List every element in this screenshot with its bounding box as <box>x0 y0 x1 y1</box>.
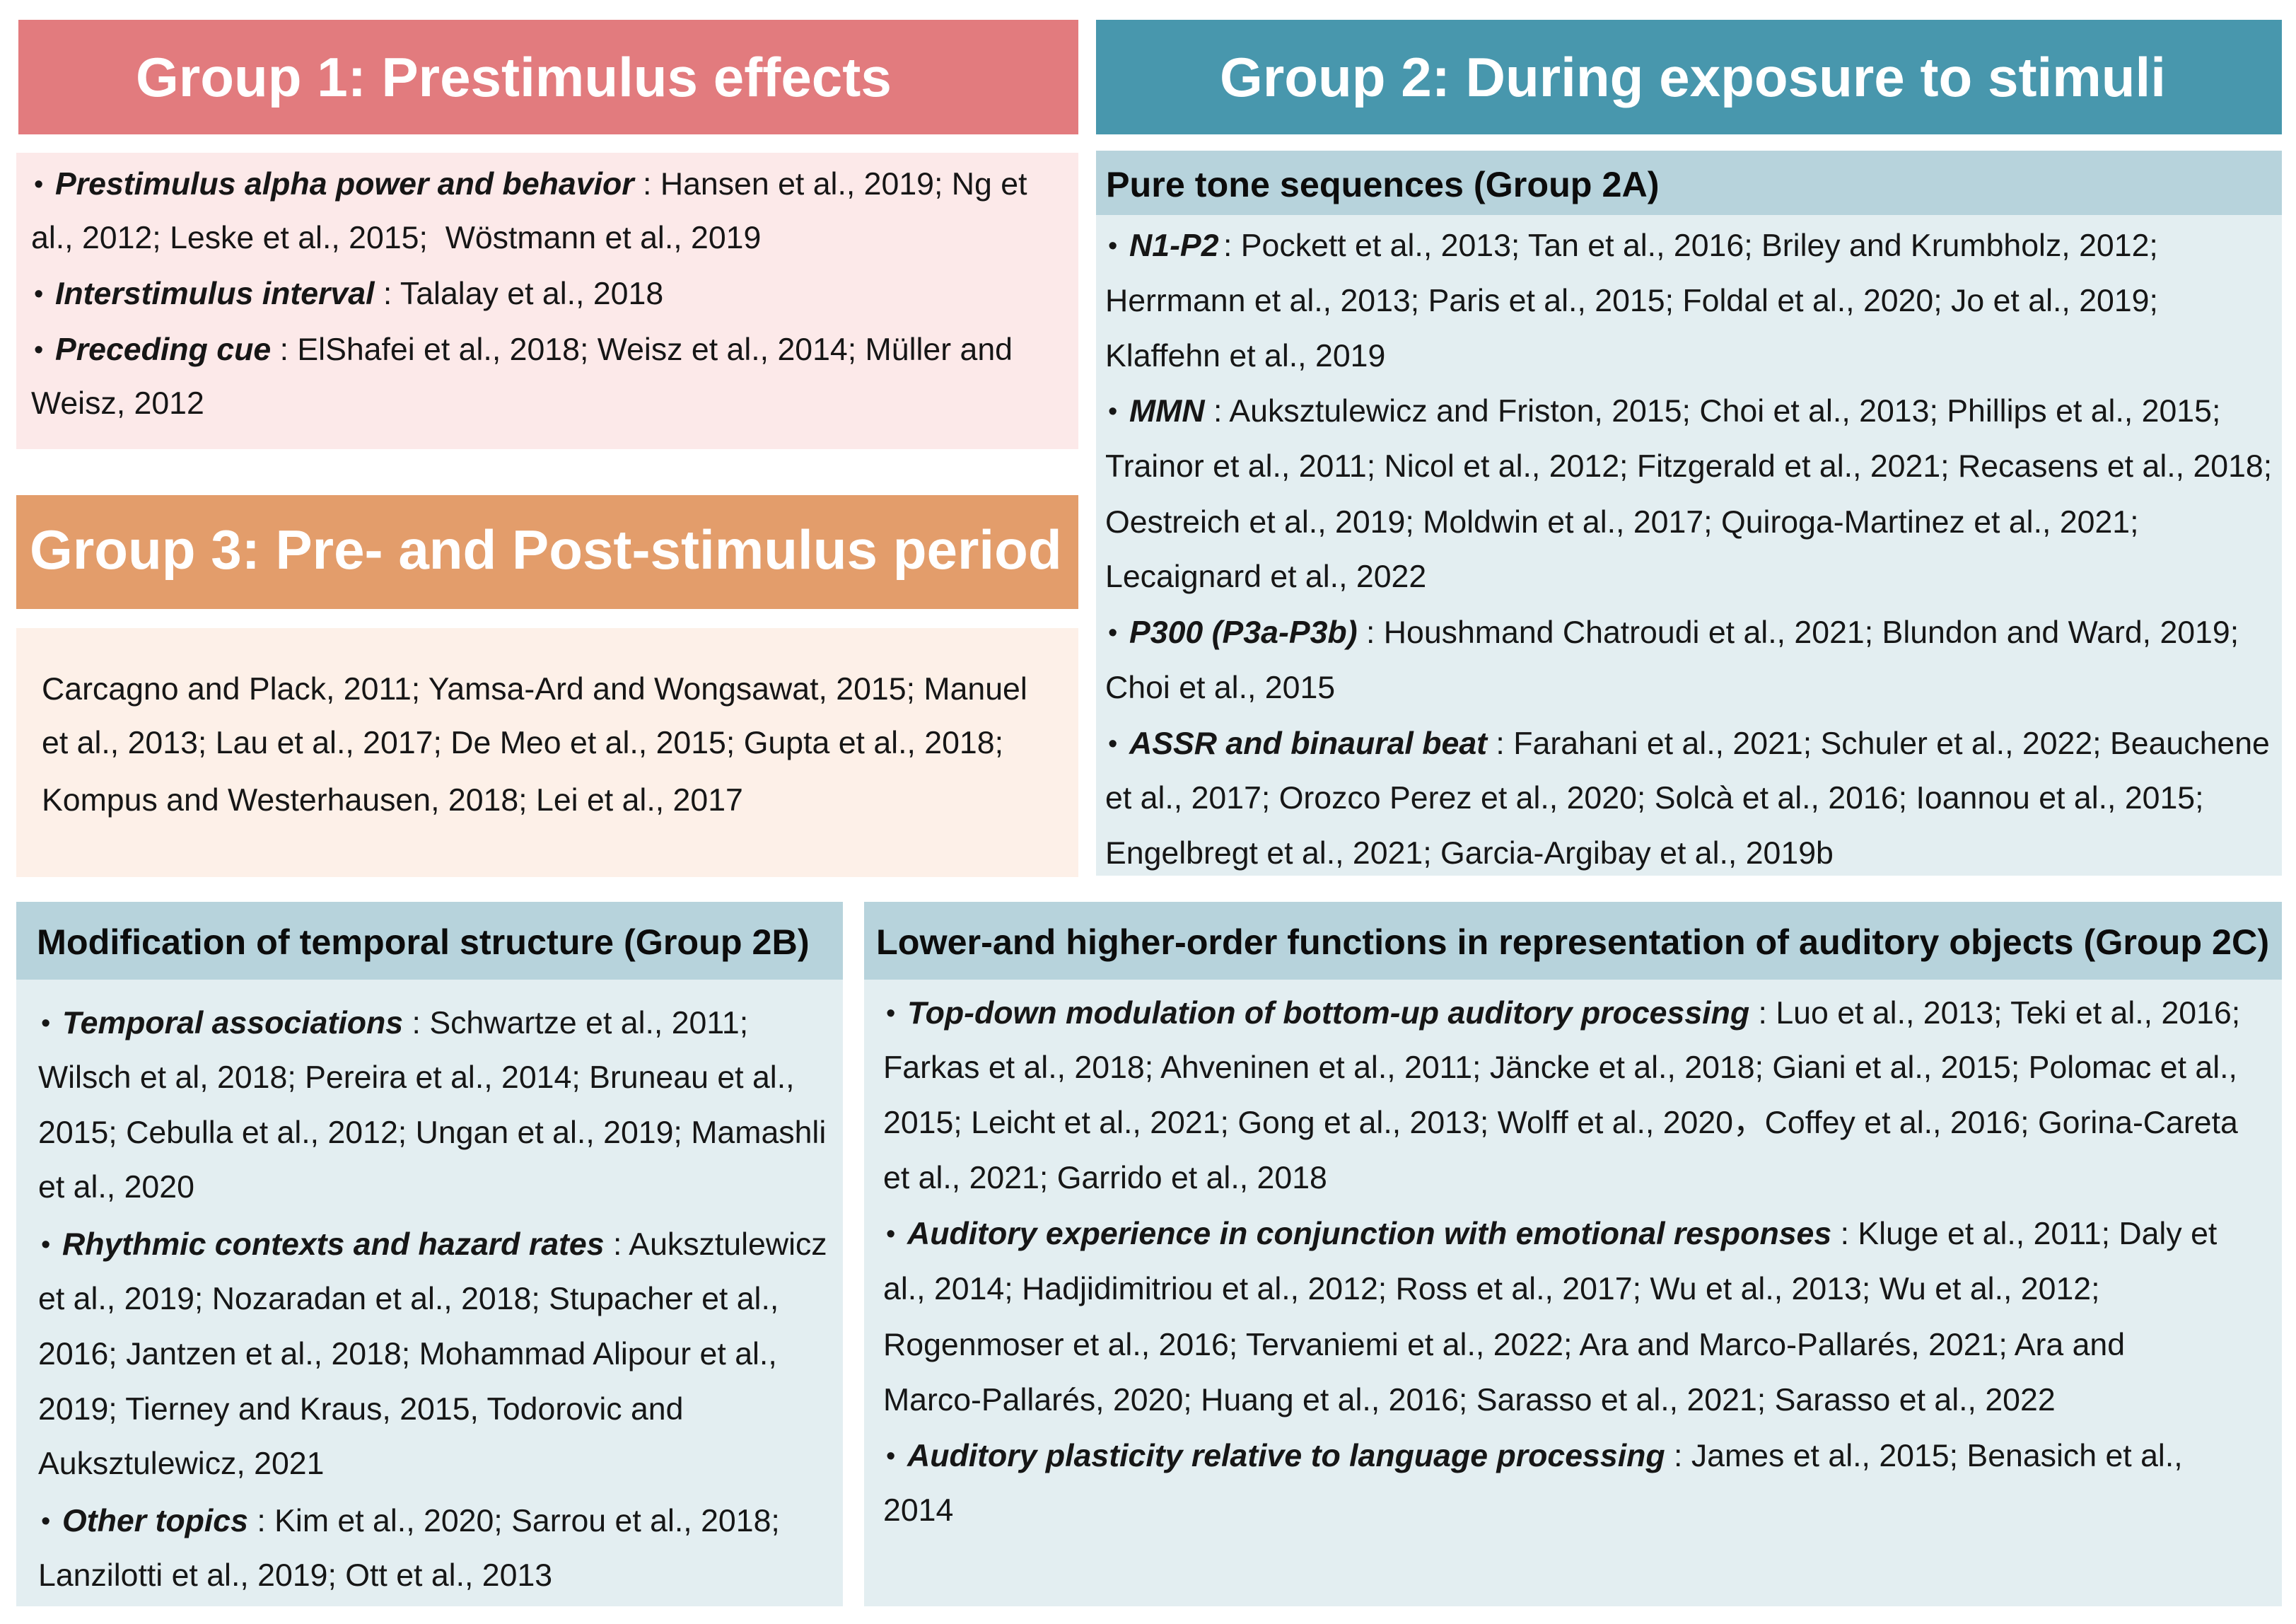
text: rhythmic contexts line 3: 2016; Jantzen et al., 2018; Mohammad Alipour et al., <box>38 1337 777 1371</box>
text: MMN line 3: Oestreich et al., 2019; Moldwin et al., 2017; Quiroga-Martinez et al., 2021; <box>1105 505 2139 540</box>
text: auditory experience line 4: Marco-Pallarés, 2020; Huang et al., 2016; Sarasso et al., 2021; Sarasso et al., 2022 <box>883 1383 2056 1417</box>
text: P300: P300 (P3a-P3b) : Houshmand Chatroudi et al., 2021; Blundon and Ward, 2019; <box>1129 615 2239 650</box>
text: other topics: Other topics : Kim et al., 2020; Sarrou et al., 2018; <box>62 1504 780 1538</box>
text: Group 3 line 1: Carcagno and Plack, 2011; Yamsa-Ard and Wongsawat, 2015; Manuel <box>42 672 1027 707</box>
text: ASSR line 3: Engelbregt et al., 2021; Garcia-Argibay et al., 2019b <box>1105 836 1834 871</box>
text: auditory experience line 2: al., 2014; Hadjidimitriou et al., 2012; Ross et al., 2017; Wu et al., 2013; Wu et al., 2012; <box>883 1272 2100 1306</box>
text: top-down modulation line 4: et al., 2021; Garrido et al., 2018 <box>883 1161 1327 1195</box>
panel: Group 3 references <box>16 628 1078 877</box>
heading: Group 1 <box>18 20 1078 134</box>
text: ASSR line 2: et al., 2017; Orozco Perez et al., 2020; Solcà et al., 2016; Ioannou et al., 2015; <box>1105 781 2204 816</box>
text: temporal associations line 4: et al., 2020 <box>38 1170 194 1205</box>
text: auditory plasticity: • <box>886 1442 895 1471</box>
subheading: Group 2C <box>864 902 2282 980</box>
text: preceding cue: Preceding cue : ElShafei et al., 2018; Weisz et al., 2014; Müller and <box>55 332 1013 367</box>
panel: Group 2C <box>864 902 2282 1606</box>
text: N1-P2: • <box>1108 231 1117 261</box>
subheading: Group 2B: Modification of temporal structure (Group 2B) <box>37 922 810 962</box>
panel: Group 1 references <box>16 153 1078 449</box>
text: rhythmic contexts line 4: 2019; Tierney and Kraus, 2015, Todorovic and <box>38 1392 683 1427</box>
text: N1-P2: N1-P2 : Pockett et al., 2013; Tan et al., 2016; Briley and Krumbholz, 2012; <box>1129 228 2158 263</box>
text: top-down modulation: • <box>886 999 895 1028</box>
text: temporal associations line 3: 2015; Cebulla et al., 2012; Ungan et al., 2019; Mamashli <box>38 1115 826 1150</box>
text: ASSR: • <box>1108 729 1117 759</box>
text: MMN line 4: Lecaignard et al., 2022 <box>1105 559 1426 594</box>
text: MMN line 2: Trainor et al., 2011; Nicol et al., 2012; Fitzgerald et al., 2021; Recasens et al., 2018; <box>1105 449 2272 484</box>
text: MMN: • <box>1108 397 1117 427</box>
heading: Group 3: Group 3: Pre- and Post-stimulus period <box>30 518 1062 581</box>
text: preceding cue: • <box>34 335 43 365</box>
panel: Group 2B <box>16 902 843 1606</box>
heading: Group 2 <box>1096 20 2282 134</box>
text: auditory experience line 3: Rogenmoser et al., 2016; Tervaniemi et al., 2022; Ara and Marco-Pallarés, 2021; Ara and <box>883 1328 2125 1362</box>
text: P300: • <box>1108 618 1117 648</box>
text: other topics: • <box>41 1507 50 1536</box>
subheading: Group 2C: Lower-and higher-order functions in representation of auditory objects (Group 2C) <box>876 922 2269 962</box>
subheading: Group 2A: Pure tone sequences (Group 2A) <box>1106 164 1660 204</box>
text: top-down modulation line 3: 2015; Leicht et al., 2021; Gong et al., 2013; Wolff et al., 2020，Coffey et al., 2016; Gorina-Careta <box>883 1106 2238 1140</box>
subheading: Group 2B <box>16 902 843 980</box>
text: top-down modulation line 2: Farkas et al., 2018; Ahveninen et al., 2011; Jäncke et al., 2018; Giani et al., 2015; Polomac et al., <box>883 1050 2237 1085</box>
text: preceding cue continuation: Weisz, 2012 <box>31 386 204 421</box>
text: top-down modulation: Top-down modulation of bottom-up auditory processing : Luo et al., 2013; Teki et al., 2016; <box>907 996 2240 1031</box>
text: Group 3 line 3: Kompus and Westerhausen, 2018; Lei et al., 2017 <box>42 783 743 818</box>
text: temporal associations: • <box>41 1009 50 1038</box>
heading: Group 3 <box>16 495 1078 609</box>
panel: Group 2A <box>1096 151 2282 876</box>
text: N1-P2 line 3: Klaffehn et al., 2019 <box>1105 339 1385 373</box>
text: N1-P2 line 2: Herrmann et al., 2013; Paris et al., 2015; Foldal et al., 2020; Jo et al., 2019; <box>1105 284 2158 318</box>
text: interstimulus interval: • <box>34 279 43 309</box>
text: prestimulus alpha continuation: al., 2012; Leske et al., 2015; Wöstmann et al., 2019 <box>31 221 761 255</box>
text: rhythmic contexts: • <box>41 1230 50 1260</box>
text: other topics line 2: Lanzilotti et al., 2019; Ott et al., 2013 <box>38 1558 552 1593</box>
text: rhythmic contexts line 2: et al., 2019; Nozaradan et al., 2018; Stupacher et al., <box>38 1282 779 1316</box>
subheading: Group 2A <box>1096 151 2282 215</box>
text: rhythmic contexts line 5: Auksztulewicz, 2021 <box>38 1446 324 1481</box>
heading: Group 2: Group 2: During exposure to stimuli <box>1220 46 2166 108</box>
text: prestimulus alpha power: • <box>34 170 43 199</box>
text: auditory experience: Auditory experience in conjunction with emotional responses : Kluge et al., 2011; Daly et <box>907 1217 2217 1251</box>
text: rhythmic contexts: Rhythmic contexts and hazard rates : Auksztulewicz <box>62 1227 827 1262</box>
text: temporal associations: Temporal associations : Schwartze et al., 2011; <box>62 1006 748 1040</box>
text: MMN: MMN : Auksztulewicz and Friston, 2015; Choi et al., 2013; Phillips et al., 2015; <box>1129 394 2220 429</box>
text: interstimulus interval: Interstimulus interval : Talalay et al., 2018 <box>55 277 663 311</box>
text: ASSR: ASSR and binaural beat : Farahani et al., 2021; Schuler et al., 2022; Beauchene <box>1129 726 2270 761</box>
text: auditory experience: • <box>886 1219 895 1249</box>
text: prestimulus alpha power: Prestimulus alpha power and behavior : Hansen et al., 2019; Ng et <box>55 167 1027 202</box>
text: P300 line 2: Choi et al., 2015 <box>1105 671 1335 705</box>
heading: Group 1: Group 1: Prestimulus effects <box>136 46 892 108</box>
text: Group 3 line 2: et al., 2013; Lau et al., 2017; De Meo et al., 2015; Gupta et al., 2018; <box>42 726 1003 760</box>
text: auditory plasticity line 2: 2014 <box>883 1493 953 1528</box>
text: temporal associations line 2: Wilsch et al, 2018; Pereira et al., 2014; Bruneau et al., <box>38 1060 795 1095</box>
text: auditory plasticity: Auditory plasticity relative to language processing : James et al., 2015; Benasich et al., <box>907 1439 2183 1473</box>
